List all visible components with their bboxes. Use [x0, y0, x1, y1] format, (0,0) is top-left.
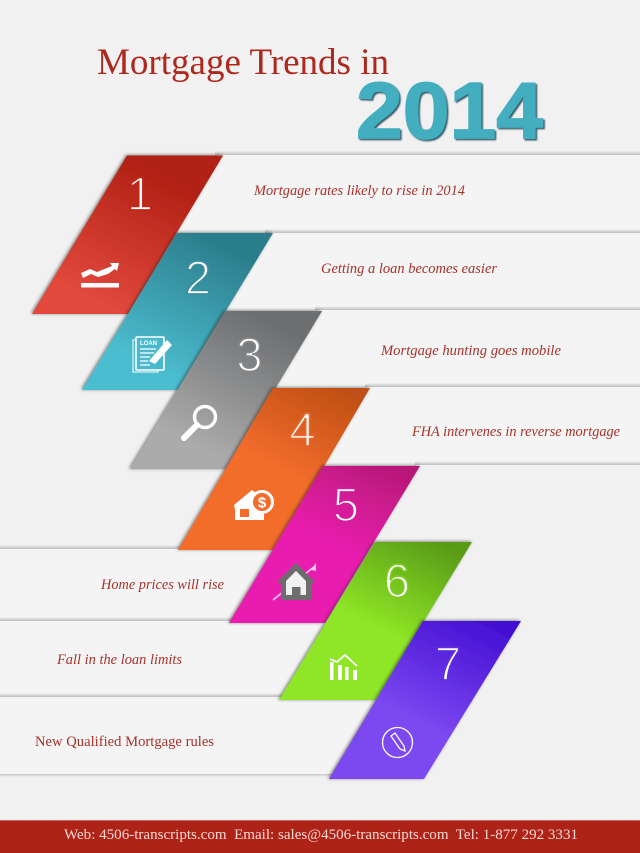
- icon: falling bar chart: [330, 655, 357, 680]
- label 6: Fall in the loan limits: [56, 652, 182, 668]
- icon: pencil in circle: [382, 728, 412, 758]
- panel: step 7: 7: [435, 637, 461, 690]
- contact details: Web: 4506-transcripts.com Email: sales@4506-transcripts.com Tel: 1-877 292 3331: [64, 827, 578, 843]
- label 2: Getting a loan becomes easier: [321, 261, 497, 277]
- panel: step 3: 3: [236, 328, 263, 381]
- title: Mortgage Trends in: [97, 42, 389, 83]
- label 3: Mortgage hunting goes mobile: [380, 343, 561, 359]
- panel: step 4: [178, 388, 370, 550]
- panel: step 1: [32, 156, 223, 314]
- icon: house with rising arrow: [273, 563, 316, 600]
- label 4: FHA intervenes in reverse mortgage: [411, 424, 620, 440]
- panel: step 6: 6: [384, 554, 410, 607]
- icon: house with dollar coin: [234, 490, 274, 520]
- footer bar: [0, 820, 640, 853]
- label 1: Mortgage rates likely to rise in 2014: [253, 183, 465, 199]
- label 7: New Qualified Mortgage rules: [35, 734, 214, 750]
- panel: step 7: [329, 621, 521, 779]
- label 5: Home prices will rise: [100, 577, 224, 593]
- icon: loan document and pen: [133, 337, 172, 372]
- year 2014: 2014: [356, 66, 544, 155]
- panel: step 3: [130, 311, 322, 469]
- icon: magnifying glass: [184, 406, 216, 438]
- panel: step 1: 1: [127, 167, 153, 220]
- panel: step 5: 5: [333, 478, 359, 531]
- panel: step 2: 2: [185, 251, 211, 304]
- icon: loan document and pen: LOAN: [140, 341, 157, 347]
- strips: text bands: [0, 151, 640, 777]
- panel: step 6: [279, 542, 472, 700]
- icon: house with dollar coin: $: [258, 494, 267, 512]
- panel: step 5: [229, 466, 420, 623]
- icon: rising trend line: [81, 263, 119, 288]
- panel: step 4: 4: [289, 403, 316, 456]
- panel: step 2: [82, 233, 273, 390]
